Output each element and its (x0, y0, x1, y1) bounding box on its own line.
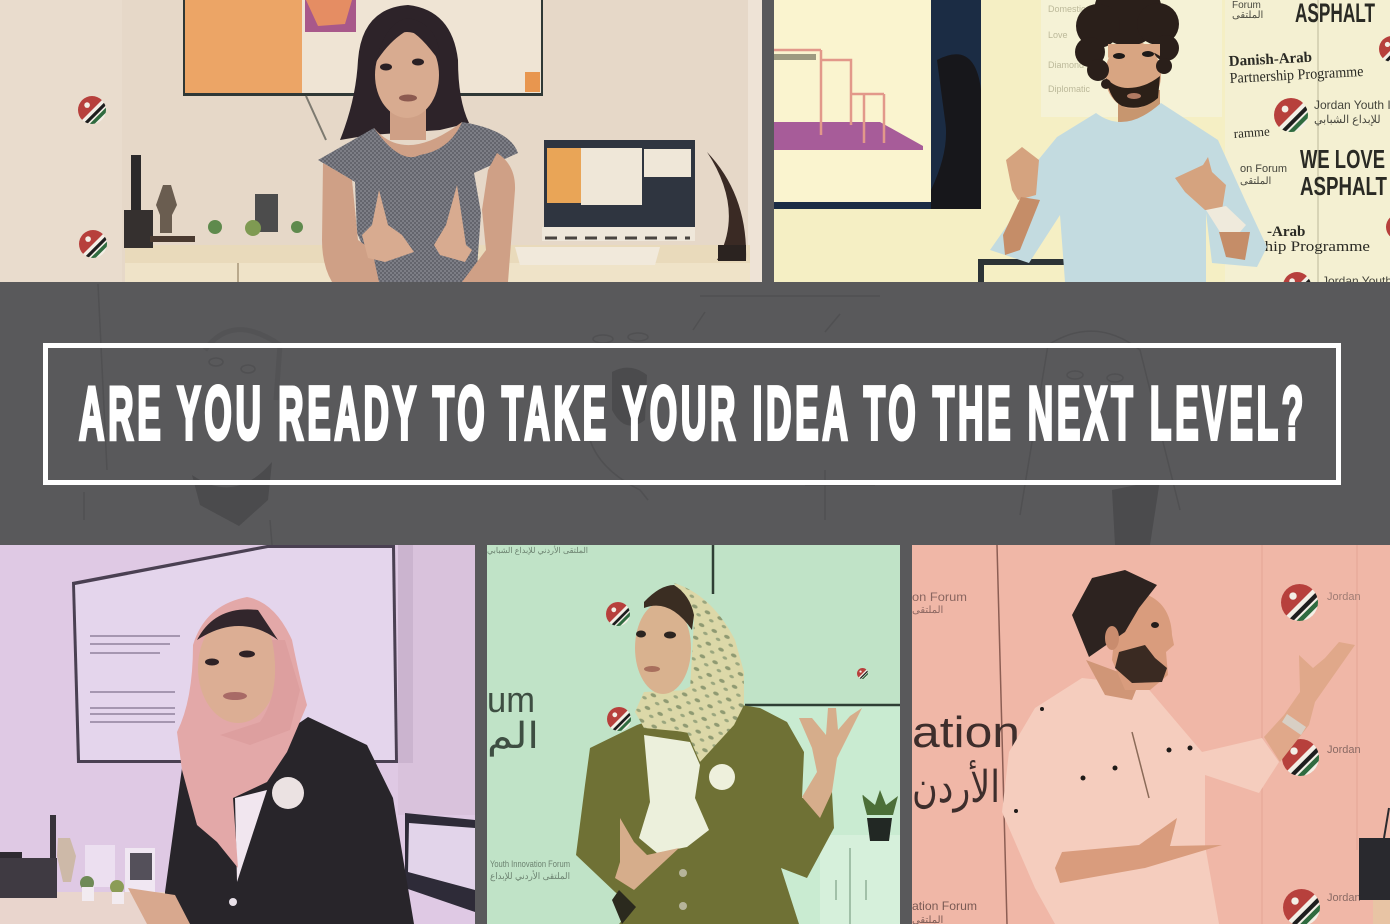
whiteboard notes: Love (1048, 30, 1068, 40)
banner text: ation (912, 708, 1020, 757)
banner text (912, 590, 1361, 924)
banner text: للإبداع الشبابي (1314, 114, 1381, 126)
title frame (46, 346, 1338, 482)
banner text: الملتقى (912, 605, 943, 616)
presenter (1002, 570, 1355, 924)
banner text: Partnership Programme (1229, 64, 1364, 87)
photo panel: man with raised hand, bottom right (912, 545, 1390, 924)
banner text: ramme (1233, 123, 1270, 141)
banner text: Jordan (1327, 744, 1361, 756)
banner text (1228, 0, 1390, 288)
curly hair (1075, 0, 1179, 89)
shirt buttons and placket (1014, 707, 1192, 813)
banner text: الملتقى الأردني للإبداع (490, 870, 570, 882)
banner text: ship Programme (1258, 239, 1370, 255)
whiteboard notes: Diplomatic (1048, 84, 1091, 94)
banner text: um (487, 679, 535, 720)
banner text: الم (487, 715, 539, 757)
photo panel: man presenting, top right (774, 0, 1390, 282)
desk items (0, 813, 475, 924)
face details (636, 630, 676, 672)
logo marks (78, 96, 107, 258)
banner text: Forum (1232, 0, 1261, 11)
presenter (576, 583, 862, 924)
banner text: on Forum (912, 590, 967, 604)
title: ARE YOU READY TO TAKE YOUR IDEA TO THE NEXT LEVEL? (79, 372, 1303, 456)
logo marks (1274, 36, 1390, 282)
banner text: Youth Innovation Forum (490, 859, 570, 870)
banner text: الملتقى (1232, 10, 1263, 21)
wall monitor (183, 0, 543, 96)
presenter (318, 5, 518, 282)
face details (380, 58, 424, 102)
wall cable (306, 96, 326, 140)
wall screen edges (713, 545, 900, 705)
whiteboard notes: Domestic (1048, 4, 1086, 14)
ghosted faces behind the title (84, 284, 1180, 545)
banner text: -Arab (1267, 224, 1305, 240)
photo panel: woman in pink hijab, bottom left (0, 545, 475, 924)
banner text: Jordan (1327, 591, 1361, 603)
table frame (981, 262, 1069, 282)
whiteboard notes (1048, 4, 1091, 94)
plant and cabinet (820, 790, 900, 924)
wall screen (72, 545, 398, 763)
logo marks (606, 602, 868, 731)
banner text: Danish-Arab (1228, 50, 1312, 70)
banner text: Jordan (1327, 892, 1361, 904)
banner text (487, 545, 588, 882)
banner text: on Forum (1240, 163, 1287, 175)
presenter (990, 0, 1267, 282)
logo marks (1281, 584, 1320, 924)
photo panel: woman in olive coat, bottom centre (487, 545, 900, 924)
banner text: الملتقى (1240, 176, 1271, 187)
desktop computer (515, 140, 695, 265)
photo panel: woman presenting, top left (0, 0, 762, 282)
banner text: الأردن (912, 759, 1000, 813)
whiteboard notes: Diamond (1048, 60, 1084, 70)
presenter (128, 597, 414, 924)
face details (205, 650, 255, 700)
projected screen (774, 0, 981, 209)
banner text: الملتقى الأردني للإبداع الشبابي (487, 545, 588, 555)
desk and shelf objects (124, 152, 750, 282)
banner text: ation Forum (912, 899, 977, 913)
printer (1359, 808, 1390, 924)
